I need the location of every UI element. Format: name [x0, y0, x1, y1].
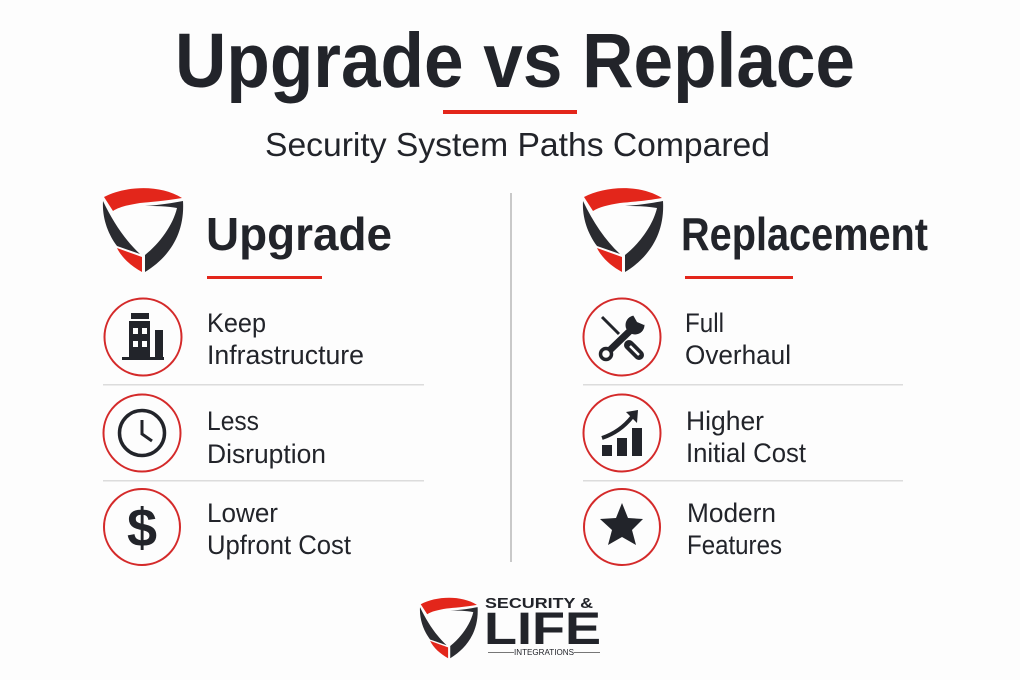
heading: upgrade: Upgrade [206, 208, 392, 260]
row: modern features [584, 489, 782, 565]
text: less disruption: Disruption [207, 439, 326, 469]
icon: dollar: $ [127, 498, 157, 558]
panel: upgrade [103, 188, 424, 565]
text: less disruption [207, 406, 326, 469]
logo wordmark integrations: INTEGRATIONS [514, 648, 574, 657]
text: lower upfront cost: Lower [207, 498, 278, 528]
icon: rising chart [584, 394, 660, 472]
row: less disruption [104, 394, 326, 472]
text: less disruption: Less [207, 406, 259, 436]
text: keep infrastructure [207, 308, 364, 370]
text: higher initial cost: Higher [686, 406, 764, 436]
footer logo [420, 596, 601, 658]
upgrade heading underline [207, 276, 322, 279]
text: lower upfront cost: Upfront Cost [207, 530, 351, 560]
text: higher initial cost [686, 406, 806, 468]
logo wordmark LIFE: LIFE [484, 603, 601, 654]
text: lower upfront cost [207, 498, 351, 560]
text: full overhaul [685, 308, 791, 370]
text: modern features: Modern [687, 498, 776, 528]
subtitle: Security System Paths Compared [265, 126, 770, 163]
text: keep infrastructure: Keep [207, 308, 266, 338]
icon: logo shield [420, 598, 478, 658]
icon: upgrade shield [103, 188, 183, 272]
icon: replacement shield [583, 188, 663, 272]
title: Upgrade vs Replace [175, 18, 855, 104]
text: full overhaul: Overhaul [685, 340, 791, 370]
row: higher initial cost [584, 394, 806, 472]
text: modern features: Features [687, 530, 782, 560]
icon: clock [104, 394, 180, 472]
title underline [443, 110, 577, 114]
icon: dollar [104, 489, 180, 565]
replacement heading underline [685, 276, 793, 279]
icon: tools [584, 298, 660, 376]
icon: star [584, 489, 660, 565]
logo wordmark top: SECURITY & [485, 596, 594, 612]
text: full overhaul: Full [685, 308, 724, 338]
text: modern features [687, 498, 782, 560]
icon: building [104, 298, 182, 376]
panel: replacement [583, 188, 928, 565]
text: higher initial cost: Initial Cost [686, 438, 806, 468]
heading: replacement: Replacement [681, 208, 928, 260]
text: keep infrastructure: Infrastructure [207, 340, 364, 370]
center divider [510, 193, 512, 562]
row: full overhaul [584, 298, 791, 376]
row: lower upfront cost [104, 489, 351, 565]
row: keep infrastructure [104, 298, 364, 376]
